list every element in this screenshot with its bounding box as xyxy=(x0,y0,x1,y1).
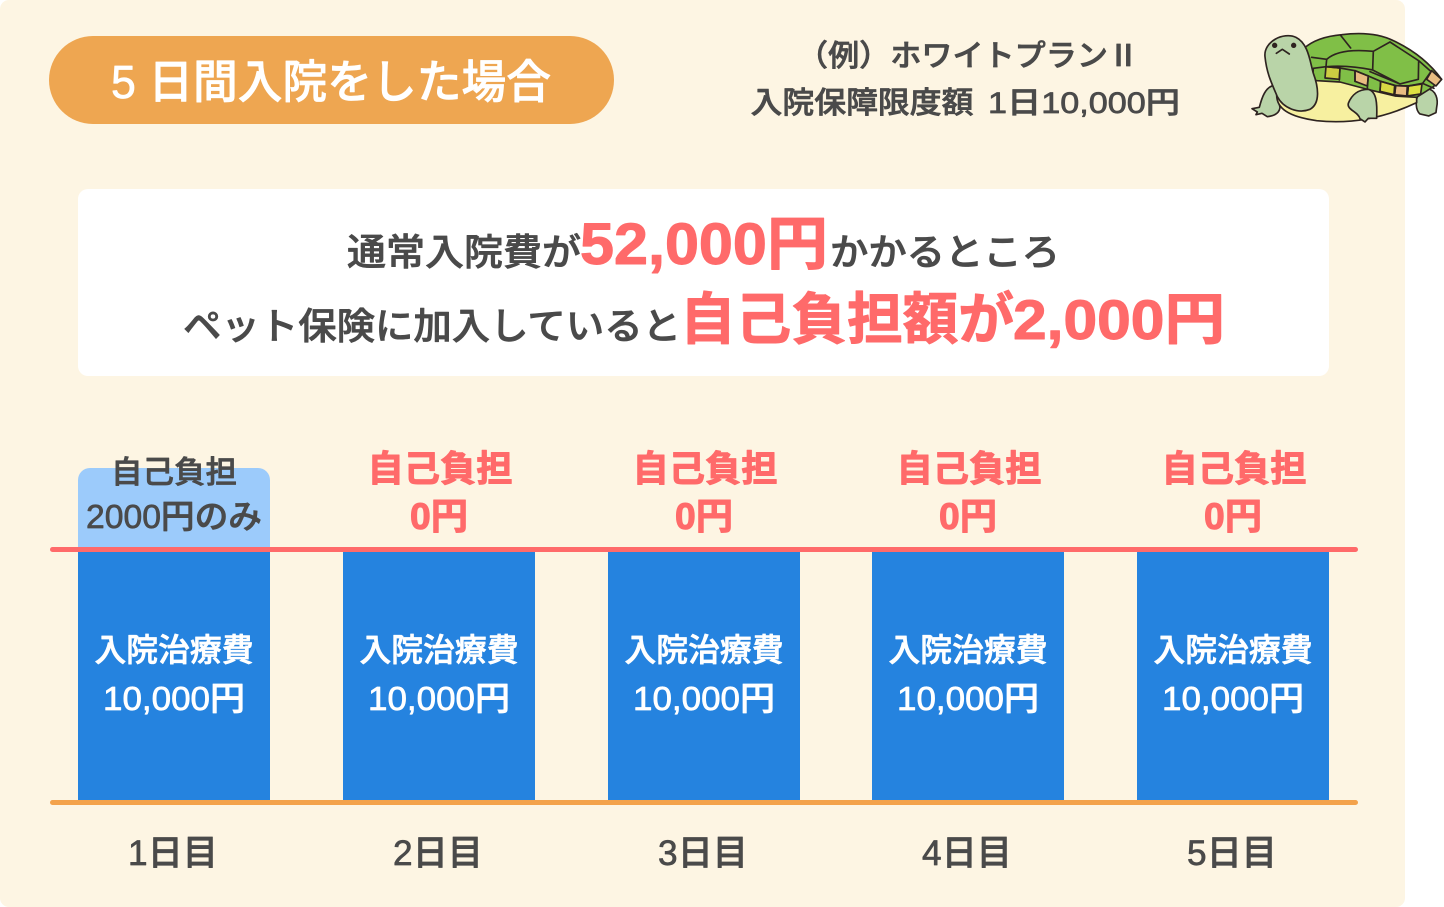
day 2 bar: 10,000円 xyxy=(368,680,510,717)
icon: turtle xyxy=(1252,34,1442,122)
day 1 self-pay block: 自己負担 xyxy=(111,455,237,490)
day 3 self-pay label: 0円 xyxy=(675,496,733,537)
day 1 self-pay block: 2000円のみ xyxy=(86,498,262,535)
red limit line xyxy=(50,547,1358,552)
callout line 2: ペット保険に加入していると xyxy=(183,306,681,347)
day 1 self-pay block xyxy=(78,455,270,552)
plan example text: （例）ホワイトプランⅡ xyxy=(797,31,1139,75)
day 3 bar: 入院治療費 xyxy=(624,632,784,668)
day 2 bar xyxy=(343,552,535,800)
day labels: 4日目 xyxy=(922,834,1012,873)
day 5 bar xyxy=(1137,552,1329,800)
heading pill: 5 日間入院をした場合 xyxy=(111,56,551,108)
day 4 bar: 10,000円 xyxy=(897,680,1039,717)
plan example text: 1日10,000円 xyxy=(988,87,1180,120)
callout line 1: 52,000円 xyxy=(580,212,828,277)
day labels: 2日目 xyxy=(393,834,483,873)
callout line 1: かかるところ xyxy=(830,232,1060,273)
callout line 2: 自己負担額が xyxy=(680,288,1014,351)
day 3 bar xyxy=(608,552,800,800)
day labels: 1日目 xyxy=(128,834,218,873)
day 1 bar: 10,000円 xyxy=(103,680,245,717)
day 4 bar: 入院治療費 xyxy=(888,632,1048,668)
callout: summary box xyxy=(78,189,1329,376)
day 4 self-pay label: 自己負担 xyxy=(896,448,1042,489)
day labels: 3日目 xyxy=(658,834,748,873)
day 3 self-pay label: 自己負担 xyxy=(632,448,778,489)
day 4 self-pay label xyxy=(896,448,1042,537)
day 3 self-pay label xyxy=(632,448,778,537)
callout line 1 xyxy=(347,212,1060,277)
day 3 bar: 10,000円 xyxy=(633,680,775,717)
callout line 2: 2,000円 xyxy=(1013,288,1225,351)
day 1 bar xyxy=(78,552,270,800)
plan example text: 入院保障限度額 xyxy=(750,87,974,120)
day 2 bar: 入院治療費 xyxy=(360,632,518,668)
day 1 bar: 入院治療費 xyxy=(94,632,254,668)
day 4 self-pay label: 0円 xyxy=(939,496,997,537)
day 2 self-pay label: 自己負担 xyxy=(368,448,512,489)
day labels xyxy=(128,834,1277,873)
callout line 1: 通常入院費が xyxy=(347,232,581,273)
day 2 self-pay label xyxy=(368,448,512,537)
orange baseline xyxy=(50,800,1358,805)
plan example text xyxy=(750,31,1180,120)
day 5 self-pay label: 0円 xyxy=(1204,496,1262,537)
day labels: 5日目 xyxy=(1187,834,1277,873)
day 5 bar: 入院治療費 xyxy=(1154,632,1312,668)
day 5 self-pay label: 自己負担 xyxy=(1162,448,1306,489)
day 5 self-pay label xyxy=(1162,448,1306,537)
day 4 bar xyxy=(872,552,1064,800)
day 5 bar: 10,000円 xyxy=(1162,680,1304,717)
day 2 self-pay label: 0円 xyxy=(410,496,468,537)
callout line 2 xyxy=(183,288,1225,351)
heading pill xyxy=(49,36,614,124)
